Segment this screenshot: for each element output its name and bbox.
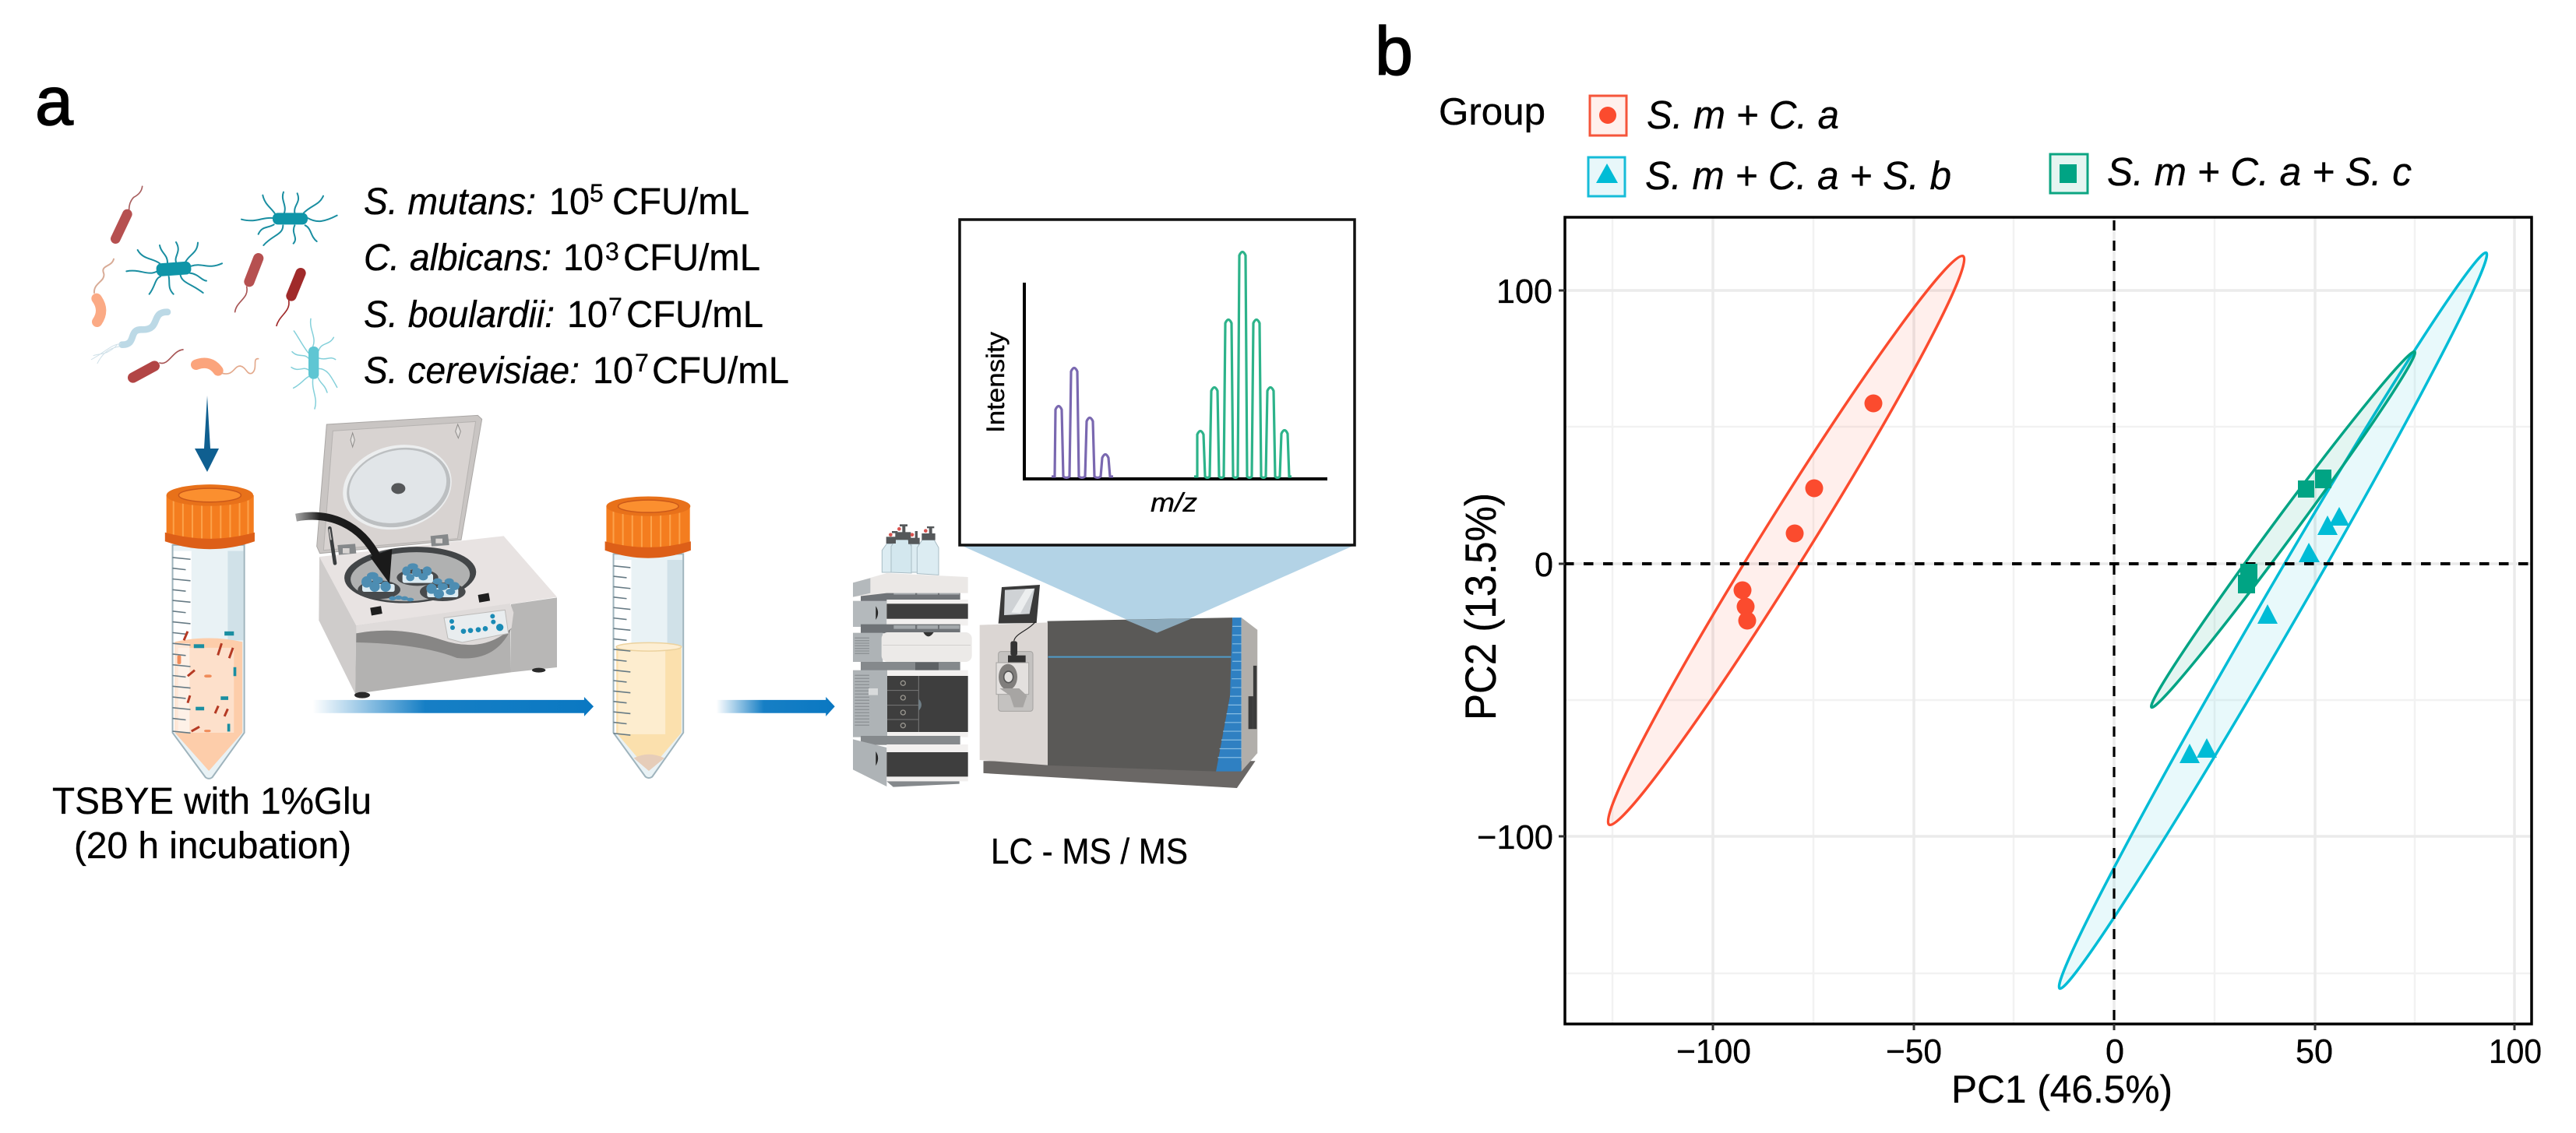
scatter plot <box>1456 217 2542 1111</box>
icon: mass spectrometer <box>983 618 1257 788</box>
icon: ion source front panel <box>980 585 1048 765</box>
icon: supernatant tube <box>605 496 691 778</box>
points: S. m + C. a + S. c <box>2238 470 2331 593</box>
text: LC-MS/MS: LC - MS / MS <box>991 831 1188 871</box>
points: S. m + C. a + S. b <box>2180 507 2349 763</box>
spectrum axes <box>1024 283 1327 479</box>
legend item: S. m + C. a: S. m + C. a <box>1647 93 1839 137</box>
line: S. boulardii: S. boulardii: <box>364 294 555 336</box>
line: C. albicans: 3 <box>605 238 619 266</box>
line: S. mutans: S. mutans: <box>364 181 536 223</box>
panel a: experimental workflow <box>35 62 1355 871</box>
grid lines <box>1566 217 2532 1024</box>
ellipse: S. m + C. a + S. c <box>2143 345 2423 714</box>
y tick labels <box>1477 273 1553 857</box>
icon: centrifuge <box>296 415 557 698</box>
callout cone <box>960 545 1353 633</box>
x tick labels <box>1676 1033 2542 1071</box>
line: S. boulardii: 10 <box>567 294 608 336</box>
ellipse: S. m + C. a + S. b <box>2043 244 2503 998</box>
icon: LC system <box>853 524 972 787</box>
line: S. mutans: 5 <box>590 179 604 207</box>
line: S. boulardii: 7 <box>608 293 622 321</box>
line: C. albicans: 10 <box>563 238 604 279</box>
line: S. mutans: CFU/mL <box>612 181 749 223</box>
panel label a: a <box>35 62 73 139</box>
x tick labels: 0 <box>2106 1033 2124 1071</box>
line: S. cerevisiae <box>364 349 789 392</box>
legend item: S. m + C. a + S. c: S. m + C. a + S. c <box>2107 150 2412 194</box>
line: S. cerevisiae: 7 <box>635 349 649 377</box>
line: S. cerevisiae: S. cerevisiae: <box>364 350 580 392</box>
y tick labels: 0 <box>1535 546 1553 584</box>
panel b: PCA score plot <box>1375 12 2542 1111</box>
line: S. cerevisiae: 10 <box>593 350 633 392</box>
y tick labels: 100 <box>1496 273 1552 311</box>
y tick labels: −100 <box>1477 818 1553 857</box>
purple peaks <box>1052 368 1113 478</box>
arrow: supernatant to LC-MS <box>717 697 835 716</box>
x tick labels: 100 <box>2489 1033 2542 1071</box>
reference lines <box>2113 217 2116 1024</box>
panel label b: b <box>1375 12 1413 90</box>
green peaks <box>1194 252 1292 478</box>
line: C. albicans: CFU/mL <box>623 238 760 279</box>
x tick labels: −100 <box>1676 1033 1751 1071</box>
arrow: centrifuge to supernatant <box>312 697 594 716</box>
legend: Group <box>1439 91 1545 133</box>
line: S. boulardii <box>364 293 763 336</box>
line: S. boulardii: CFU/mL <box>626 294 763 336</box>
panel: mass spectrum inset <box>960 220 1355 545</box>
legend <box>1439 91 2412 198</box>
line: S. mutans: 10 <box>549 181 590 223</box>
line: C. albicans: C. albicans: <box>364 238 551 279</box>
text: culture conditions <box>52 781 372 867</box>
text: species concentrations <box>364 179 789 392</box>
y axis title: PC2 (13.5%) <box>1456 493 1505 720</box>
x axis title: PC1 (46.5%) <box>1951 1068 2173 1111</box>
axis ticks <box>1559 290 2514 1030</box>
points: S. m + C. a <box>1734 394 1882 629</box>
axis label m/z: m/z <box>1151 488 1197 518</box>
line: S. mutans <box>364 179 749 223</box>
icon: microbe mixture <box>91 186 337 409</box>
text: culture conditions: (20 h incubation) <box>74 825 351 867</box>
x tick labels: −50 <box>1886 1033 1942 1071</box>
plot frame <box>1565 217 2532 1024</box>
x tick labels: 50 <box>2296 1033 2333 1071</box>
ellipse: S. m + C. a <box>1589 244 1983 837</box>
line: C. albicans <box>364 238 760 279</box>
line: S. cerevisiae: CFU/mL <box>652 350 789 392</box>
arrow: inoculation <box>195 396 219 472</box>
axis label intensity: Intensity <box>981 332 1010 433</box>
text: culture conditions: TSBYE with 1%Glu <box>52 781 372 822</box>
legend item: S. m + C. a + S. b: S. m + C. a + S. b <box>1645 153 1951 198</box>
icon: culture tube <box>165 484 255 779</box>
